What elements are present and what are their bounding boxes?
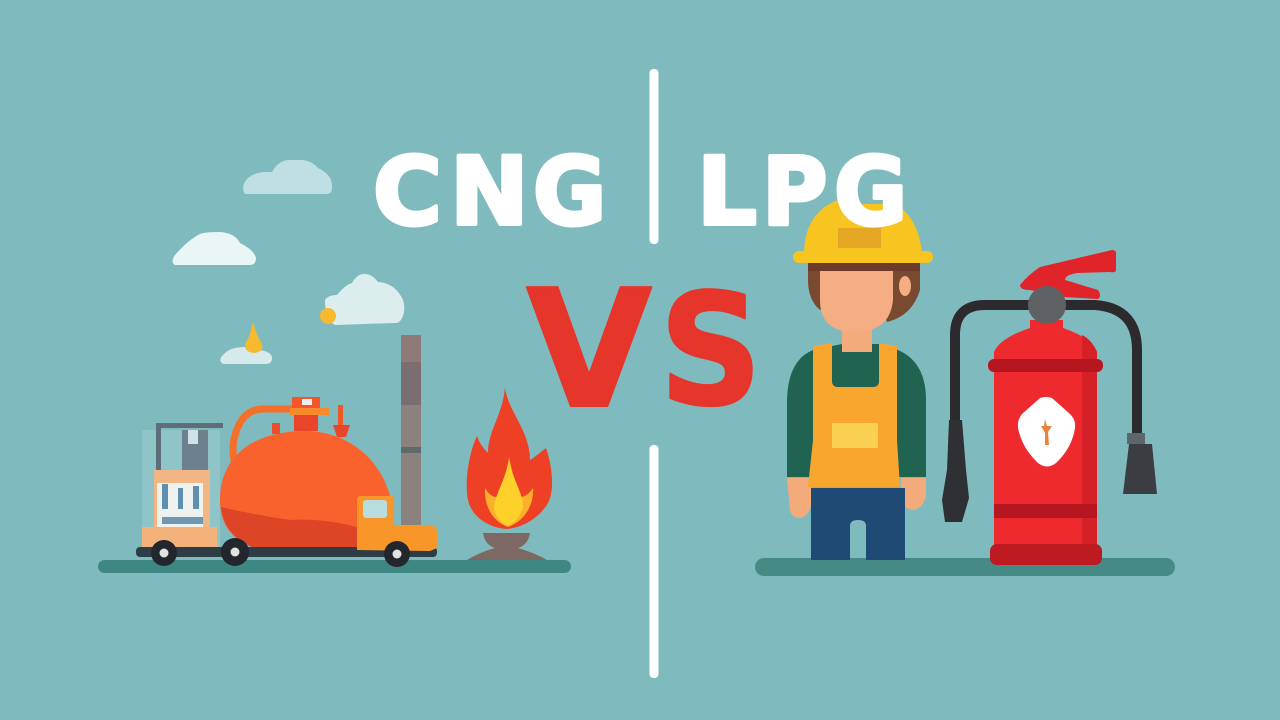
right nozzle — [1123, 433, 1157, 494]
trousers — [811, 488, 905, 560]
cab — [357, 496, 437, 551]
icon: smokestack — [401, 335, 421, 525]
tank body — [220, 431, 393, 548]
heading: CNG: C — [373, 138, 442, 247]
icon: small cloud with gas drop — [220, 321, 272, 364]
icon: CNG tanker truck — [136, 397, 437, 567]
divider bottom — [650, 445, 658, 678]
vest — [808, 343, 900, 487]
cart column — [182, 430, 208, 470]
cylinder body — [994, 320, 1097, 550]
shield label — [1018, 397, 1075, 466]
cart container — [142, 470, 217, 547]
lower stripe — [994, 504, 1097, 518]
hard hat — [793, 195, 933, 263]
inner flame — [485, 457, 533, 527]
outer flame — [467, 387, 552, 529]
heading: LPG — [697, 137, 907, 247]
cylinder shade — [1082, 335, 1097, 550]
left hose — [955, 305, 1030, 425]
heading: CNG — [373, 137, 606, 247]
right hose — [1065, 305, 1137, 435]
hands — [787, 478, 926, 518]
face — [820, 270, 893, 332]
flame core — [494, 460, 523, 526]
tank shadow — [221, 507, 360, 548]
handle — [1020, 250, 1116, 299]
wheels — [151, 538, 410, 567]
heading: CNG: N — [450, 138, 529, 247]
icon: flame on burner — [467, 387, 552, 560]
top band — [988, 359, 1103, 372]
heading: VS — [526, 256, 762, 445]
hair — [808, 262, 920, 322]
neck — [842, 328, 872, 352]
chassis — [136, 547, 437, 557]
gap inside letter G — [855, 168, 889, 204]
icon: worker — [787, 195, 933, 560]
left nozzle — [942, 420, 969, 522]
base — [990, 544, 1102, 565]
icon: fire extinguisher — [942, 250, 1157, 565]
ground: right — [755, 558, 1175, 576]
cart frame — [156, 423, 223, 470]
vest pocket — [832, 423, 878, 448]
heading: LPG: G — [834, 137, 907, 247]
icon: cloud top — [243, 160, 332, 194]
burner — [467, 533, 547, 560]
heading: CNG: G — [533, 137, 606, 247]
tank fittings — [272, 397, 350, 437]
divider top — [650, 69, 658, 244]
ground: left — [98, 560, 571, 573]
glass cabinet — [142, 430, 220, 547]
knob — [1028, 286, 1066, 324]
hair fringe — [808, 262, 920, 271]
arms and shirt — [787, 344, 926, 477]
icon: cloud left — [172, 232, 256, 265]
heading: VS: S — [659, 261, 762, 441]
pipe — [233, 409, 300, 480]
ear — [899, 276, 911, 296]
icon: cloud right — [320, 274, 404, 325]
heading: LPG: L — [697, 138, 757, 247]
cab window — [363, 500, 387, 518]
heading: LPG: P — [762, 137, 827, 247]
heading: VS: V — [526, 256, 652, 445]
